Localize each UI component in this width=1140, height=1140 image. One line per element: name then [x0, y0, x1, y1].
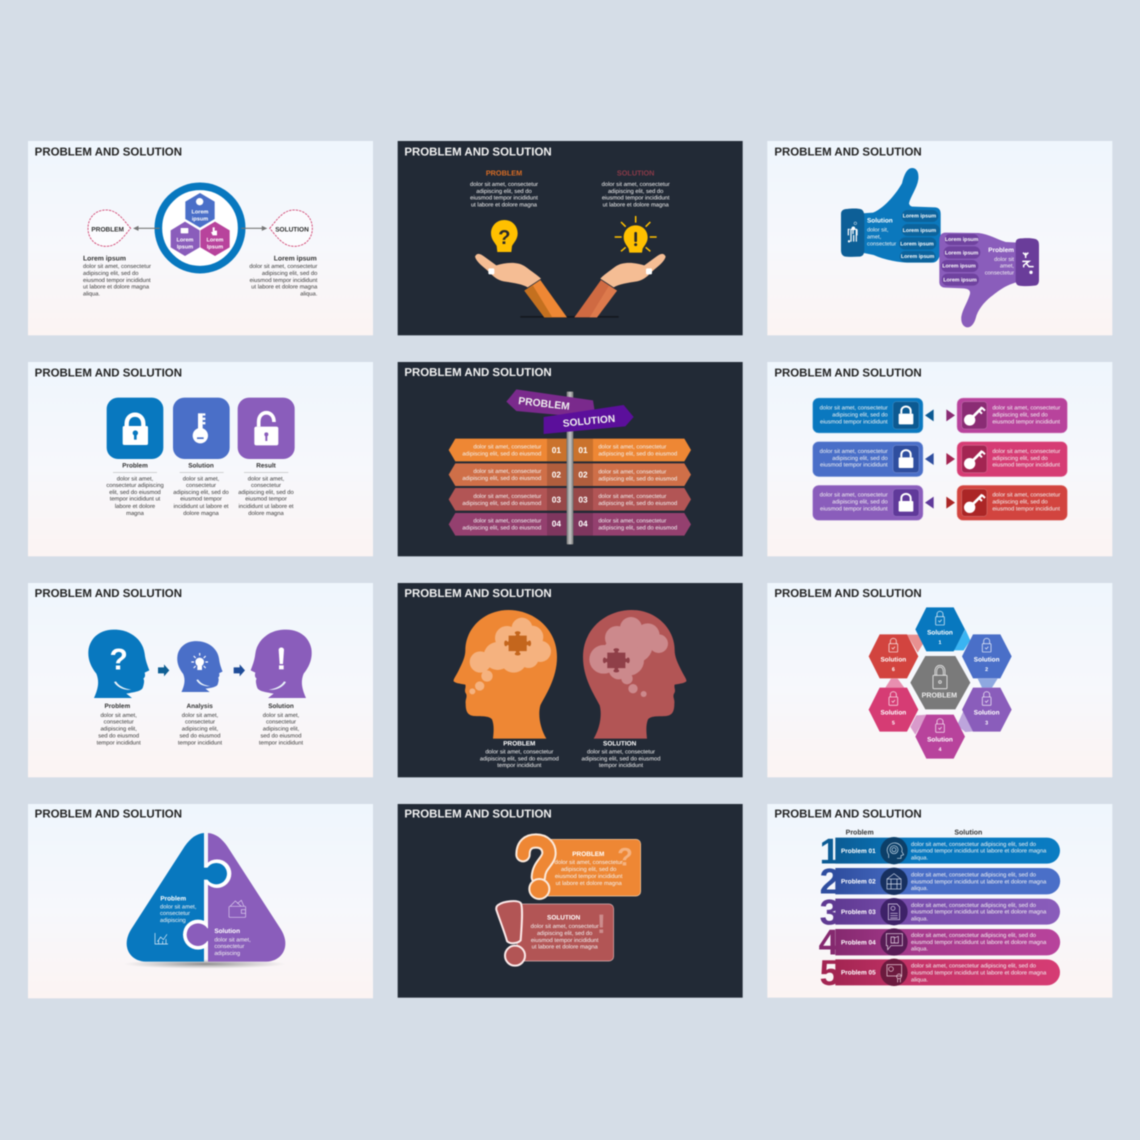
row 3: dolor sit amet, consectetur adipiscing elit, sed do [911, 902, 1036, 908]
thumbs down pills [941, 234, 980, 286]
row 4: dolor sit amet, consectetur adipiscing elit, sed do [911, 932, 1036, 938]
text right: ut labore et dolore magna [251, 283, 317, 290]
column text: problem: consectetur adipiscing [106, 482, 164, 488]
text left: Lorem ipsum [83, 255, 126, 262]
text: solution: SOLUTION [603, 740, 636, 747]
icon: question mark [523, 841, 549, 899]
arrows left [925, 409, 934, 509]
hexagon right: Ipsum [207, 244, 223, 250]
solution card: SOLUTION [547, 914, 580, 921]
row 2 [820, 861, 1060, 901]
column text: problem: Problem [122, 462, 148, 469]
row 4 right [573, 513, 691, 536]
row 4: eiusmod tempor incididunt ut labore et dolore magna [911, 939, 1046, 945]
problem card: eiusmod tempor incididunt [555, 873, 623, 879]
column text: solution: incididunt ut labore et [173, 503, 229, 509]
hexagon: solution 5: 5 [892, 720, 895, 726]
row 3 left: adipiscing elit, sed do eiusmod [462, 500, 541, 506]
row 5 [820, 952, 1060, 993]
problem sign: PROBLEM [518, 395, 570, 412]
row 1 right: 01 [578, 446, 588, 455]
text: analysis: sed do eiusmod [180, 732, 220, 739]
solution drop [270, 210, 312, 246]
thumbs up pill labels: Lorem ipsum [900, 241, 934, 247]
row 2: aliqua. [911, 885, 928, 891]
key box 2: eiusmod tempor incididunt [992, 461, 1060, 468]
row 2 right: dolor sit amet, consectetur [598, 468, 666, 475]
thumbs up text: dolor sit, [867, 227, 888, 233]
thought cloud red [589, 617, 668, 697]
text: solution: dolor sit amet, [263, 712, 299, 718]
column text: solution: dolore magna [183, 510, 219, 516]
title: PROBLEM AND SOLUTION [404, 366, 552, 379]
key box 1: dolor sit amet, consectetur [992, 404, 1060, 411]
problem text: PROBLEM [486, 169, 522, 177]
row 4 left [449, 513, 567, 536]
panel: question and exclamation cards [398, 804, 743, 998]
thumbs up text: amet, [867, 234, 881, 240]
lock box 1: dolor sit amet, consectetur [820, 404, 888, 411]
panel: three heads [28, 583, 373, 777]
key box 1: eiusmod tempor incididunt [992, 418, 1060, 425]
text: problem: adipiscing elit, [100, 725, 137, 732]
text: problem: tempor incididunt [97, 739, 141, 746]
thumbs up pill labels: Lorem ipsum [901, 254, 934, 259]
lock box 1 [813, 398, 923, 433]
row 3: Problem 03 [841, 909, 876, 916]
row 1: dolor sit amet, consectetur adipiscing elit, sed do [911, 841, 1036, 847]
hexagon right: Lorem [207, 237, 223, 243]
problem text: dolor sit amet, [160, 903, 196, 910]
solution sign: SOLUTION [562, 413, 616, 429]
text: problem: adipiscing elit, sed do eiusmod [480, 755, 559, 762]
column text: problem: tempor incididunt ut [110, 495, 160, 502]
thumbs down text: amet, [1000, 263, 1014, 269]
row 3: eiusmod tempor incididunt ut labore et dolore magna [911, 908, 1046, 915]
hexagon right [200, 222, 230, 256]
hexagon: solution 6 [869, 634, 918, 678]
purple half [208, 833, 285, 962]
row 4: Problem 04 [841, 939, 876, 946]
panel: hands with bulbs [398, 141, 743, 335]
puzzle knob purple [183, 920, 213, 950]
panel: numbered rows [767, 804, 1112, 998]
solution text: consectetur [214, 943, 244, 949]
panel: two heads with puzzle [398, 583, 743, 777]
text right: eiusmod tempor incididunt [250, 277, 317, 283]
left shadow line [520, 316, 619, 318]
thumbs up hand [862, 168, 941, 263]
hexagon left [171, 222, 200, 256]
row 1: 1 [820, 831, 840, 871]
shadow [123, 959, 286, 969]
row 2 right: adipiscing elit, sed do eiusmod [598, 475, 677, 482]
text: solution: tempor incididunt [259, 739, 303, 746]
text right: aliqua. [300, 290, 317, 297]
thumbs down cuff [1016, 238, 1039, 286]
hexagon: solution 2: 2 [985, 667, 988, 672]
text left: adipiscing elit, sed do [83, 270, 138, 276]
text: problem: tempor incididunt [497, 762, 541, 768]
lock box 2: dolor sit amet, consectetur [820, 448, 888, 454]
text left: ut labore et dolore magna [83, 283, 149, 290]
row 5: 5 [820, 952, 840, 993]
column text: result: Result [256, 462, 276, 469]
text: solution: tempor incididunt [599, 762, 643, 768]
solution card: adipiscing elit, sed do [537, 930, 592, 936]
text: solution: adipiscing elit, sed do eiusmod [582, 755, 660, 762]
row 1 right: adipiscing elit, sed do eiusmod [598, 450, 677, 457]
arrows right [946, 409, 955, 509]
solution card: dolor sit amet, consectetur [531, 923, 599, 929]
hexagon: solution 5 [869, 688, 918, 732]
hexagon: solution 5: Solution [880, 709, 906, 716]
lock box 3: dolor sit amet, consectetur [820, 491, 888, 498]
lock box 2: eiusmod tempor incididunt [820, 461, 888, 468]
lock box 3: eiusmod tempor incididunt [820, 505, 888, 512]
solution card [517, 904, 614, 961]
hexagon: solution 4 [915, 715, 965, 759]
column headers: Problem [846, 829, 874, 836]
problem text: dolor sit amet, consectetur [470, 181, 538, 187]
column text: problem: dolor sit amet, [117, 475, 153, 482]
panel: puzzle triangle [28, 804, 373, 998]
problem drop: PROBLEM [91, 226, 124, 233]
problem card: ? [617, 843, 633, 871]
row 1: aliqua. [911, 854, 928, 861]
text right: adipiscing elit, sed do [262, 270, 317, 276]
row 2 left: dolor sit amet, consectetur [473, 468, 541, 474]
key box 3 [957, 485, 1067, 520]
column text: problem: elit, sed do eiusmod [109, 489, 161, 495]
icon: open lock card [238, 398, 295, 459]
column text: solution: consectetur [186, 482, 216, 488]
connectors [885, 629, 998, 735]
problem text: eiusmod tempor incididunt [470, 194, 538, 201]
column text: solution: Solution [188, 462, 214, 469]
row 1 [820, 831, 1060, 871]
text: analysis: adipiscing elit, [182, 725, 218, 732]
hexagon: solution 4: Solution [927, 736, 953, 743]
text: solution: dolor sit amet, consectetur [587, 748, 655, 755]
thumbs up pill labels: Lorem ipsum [903, 213, 936, 219]
text right: dolor sit amet, consectetur [249, 263, 317, 269]
column headers: Solution [954, 829, 982, 836]
text: problem: PROBLEM [503, 740, 535, 747]
head: problem: ? [110, 643, 128, 676]
column text: result: consectetur [251, 482, 281, 488]
row 1: Problem 01 [841, 848, 876, 855]
panel: lock key unlock [28, 362, 373, 556]
thumbs up text: consectetur [867, 240, 896, 247]
key box 1 [957, 398, 1067, 433]
icon: wallet [229, 900, 246, 917]
title: PROBLEM AND SOLUTION [35, 366, 182, 379]
puzzle knob blue [203, 859, 231, 888]
puzzle orange [504, 631, 531, 655]
solution text: SOLUTION [617, 169, 654, 177]
row 3 left: dolor sit amet, consectetur [473, 493, 541, 499]
row 1 left [449, 439, 567, 461]
problem card [544, 839, 641, 896]
row 3 right: dolor sit amet, consectetur [598, 493, 666, 499]
lock box 3: adipiscing elit, sed do [832, 498, 888, 505]
panel: signpost [398, 362, 743, 556]
row 4 right: dolor sit amet, consectetur [598, 517, 666, 524]
hexagon: solution 2: Solution [974, 656, 1000, 663]
column text: result: dolor sit amet, [248, 475, 284, 482]
icon: exclamation bulb [615, 216, 657, 253]
thumbs up pills [899, 210, 940, 262]
row 4: aliqua. [911, 945, 928, 952]
puzzle red [603, 648, 630, 672]
column text: result: eiusmod tempor [245, 495, 287, 502]
problem card: adipiscing elit, sed do [561, 866, 616, 872]
blue ring [158, 186, 242, 270]
text: problem: dolor sit amet, consectetur [485, 748, 553, 755]
text left: dolor sit amet, consectetur [83, 263, 151, 269]
row 4 right: adipiscing elit, sed do eiusmod [598, 524, 677, 531]
text: solution: sed do eiusmod [261, 732, 301, 739]
row 3 right [573, 488, 691, 511]
row 4 left: dolor sit amet, consectetur [473, 517, 541, 524]
column text: problem: magna [126, 510, 144, 516]
problem card: dolor sit amet, consectetur [555, 859, 623, 865]
hexagon: solution 1 [915, 607, 965, 651]
key box 3: adipiscing elit, sed do [992, 498, 1048, 505]
title: PROBLEM AND SOLUTION [774, 366, 922, 379]
arrow left [134, 227, 160, 230]
row 1 left: 01 [552, 446, 561, 455]
thumbs down pill labels: Lorem ipsum [945, 250, 978, 256]
row 3 left [449, 488, 567, 511]
thumbs up cuff [841, 209, 864, 257]
solution text: dolor sit amet, [214, 936, 251, 943]
arrow right [241, 227, 266, 230]
hexagon: solution 3: 3 [985, 720, 988, 726]
arrow 2 [234, 664, 245, 676]
hexagon: solution 6: Solution [880, 656, 906, 663]
thumbs down pill labels: Lorem ipsum [942, 263, 976, 269]
row 2: 2 [820, 861, 840, 901]
hexagon: problem: PROBLEM [922, 692, 957, 699]
title: PROBLEM AND SOLUTION [774, 146, 922, 158]
solution text: eiusmod tempor incididunt [602, 194, 670, 201]
icon: question bulb: ? [498, 226, 510, 248]
row 2: dolor sit amet, consectetur adipiscing elit, sed do [911, 871, 1036, 878]
problem text: Problem [160, 895, 186, 902]
thumbs down text: consectetur [985, 269, 1014, 276]
pole [567, 392, 573, 544]
head: orange [454, 610, 557, 739]
row 1 right [573, 439, 691, 461]
problem card: PROBLEM [572, 851, 604, 858]
column text: result: incididunt ut labore et [238, 503, 294, 509]
thumbs up pill labels: Lorem ipsum [903, 228, 936, 233]
solution drop: SOLUTION [275, 226, 309, 233]
hexagon: problem [910, 656, 970, 709]
column text: solution: adipiscing elit, sed do [173, 489, 229, 495]
row 4 left: adipiscing elit, sed do eiusmod [462, 524, 541, 531]
icon: lock card [107, 398, 163, 459]
problem card: ut labore et dolore magna [556, 880, 622, 886]
row 5: eiusmod tempor incididunt ut labore et dolore magna [911, 969, 1046, 976]
row 4 [819, 922, 1060, 962]
problem text: adipiscing [160, 917, 186, 923]
right arm [574, 254, 666, 317]
text: analysis: consectetur [185, 718, 215, 725]
row 3: aliqua. [911, 915, 928, 922]
row 1 left: dolor sit amet, consectetur [473, 443, 541, 450]
row 2 right: 02 [578, 470, 588, 479]
text: solution: adipiscing elit, [263, 725, 299, 732]
lock box 1: adipiscing elit, sed do [832, 411, 888, 418]
icon: exclamation mark [496, 901, 525, 966]
row 5: aliqua. [911, 976, 928, 983]
column text: solution: dolor sit amet, [183, 475, 219, 482]
key box 1: adipiscing elit, sed do [992, 411, 1048, 418]
panel: locks and keys [767, 362, 1112, 556]
text: analysis: Analysis [187, 703, 213, 710]
row 3: 3 [820, 892, 840, 932]
hexagon top: Lorem [192, 208, 208, 215]
hexagon: solution 4: 4 [939, 747, 942, 752]
hexagon: solution 3 [962, 688, 1012, 732]
hexagon: solution 1: 1 [939, 640, 942, 645]
row 2 left: adipiscing elit, sed do eiusmod [462, 475, 541, 481]
row 5: Problem 05 [841, 969, 876, 976]
column text: result: adipiscing elit, sed do [238, 489, 294, 495]
lock box 3 [813, 485, 923, 520]
panel: circle hexagons problem solution [28, 141, 373, 335]
row 4 right: 04 [578, 519, 588, 529]
key box 3: eiusmod tempor incididunt [992, 505, 1060, 512]
panel: thumbs up and down [767, 141, 1112, 335]
thumbs down text: Problem [988, 247, 1014, 254]
text: problem: Problem [105, 703, 130, 710]
text: problem: consectetur [104, 718, 134, 725]
column text: problem: labore et dolore [115, 503, 155, 509]
thumbs down pill labels: Lorem ipsum [943, 277, 977, 283]
solution sign [544, 405, 634, 434]
solution card: eiusmod tempor incididunt [531, 937, 599, 943]
solution text: adipiscing elit, sed do [608, 188, 663, 194]
problem text: consectetur [160, 910, 190, 916]
thought cloud orange [469, 618, 551, 694]
row 1 right: dolor sit amet, consectetur [598, 443, 666, 450]
row 3 [820, 892, 1060, 932]
hexagon: solution 6: 6 [892, 667, 895, 672]
left arm [475, 254, 567, 317]
problem sign [506, 389, 595, 416]
text: analysis: tempor incididunt [178, 739, 222, 746]
hexagon left: Lorem [177, 237, 193, 243]
row 2 left: 02 [552, 470, 561, 479]
row 1 left: adipiscing elit, sed do eiusmod [462, 450, 541, 457]
title: PROBLEM AND SOLUTION [35, 587, 182, 600]
thumbs up text: Solution [867, 217, 893, 224]
panel: hexagon solutions [767, 583, 1112, 777]
thumbs down hand [939, 233, 1019, 327]
problem text: adipiscing elit, sed do [476, 188, 532, 194]
key box 2: adipiscing elit, sed do [992, 455, 1048, 461]
icon: key card [173, 398, 230, 459]
column text: result: dolore magna [248, 510, 284, 516]
lock box 2: adipiscing elit, sed do [832, 455, 888, 461]
lock box 1: eiusmod tempor incididunt [820, 418, 888, 425]
hexagon: solution 3: Solution [974, 709, 1000, 716]
text right: Lorem ipsum [274, 255, 317, 262]
row 3 right: 03 [578, 495, 588, 504]
head: problem [88, 630, 149, 698]
solution text: dolor sit amet, consectetur [602, 181, 670, 187]
row 5: dolor sit amet, consectetur adipiscing elit, sed do [911, 962, 1036, 969]
key box 3: dolor sit amet, consectetur [992, 491, 1060, 498]
icon: chart [155, 933, 168, 944]
solution text: adipiscing [214, 950, 240, 956]
row 2: eiusmod tempor incididunt ut labore et dolore magna [911, 878, 1046, 885]
key box 2 [957, 442, 1067, 477]
icon: question bulb [491, 220, 518, 252]
row 2 left [449, 463, 567, 486]
row 4 left: 04 [552, 519, 561, 529]
title: PROBLEM AND SOLUTION [774, 807, 922, 820]
row 4: 4 [819, 922, 839, 962]
text: solution: Solution [268, 703, 294, 710]
column text: solution: eiusmod tempor [180, 495, 222, 502]
title: PROBLEM AND SOLUTION [404, 587, 552, 600]
solution card: ! [597, 909, 606, 939]
hexagon left: Ipsum [177, 244, 193, 250]
key box 2: dolor sit amet, consectetur [992, 448, 1060, 454]
thumbs down pill labels: Lorem ipsum [945, 237, 978, 242]
solution card: ut labore et dolore magna [532, 943, 598, 950]
hexagon top [185, 193, 215, 228]
blue half [127, 833, 204, 962]
hexagon: solution 2 [962, 634, 1012, 678]
head: solution [251, 630, 312, 698]
text: problem: dolor sit amet, [100, 712, 137, 718]
row 1: eiusmod tempor incididunt ut labore et dolore magna [911, 847, 1046, 854]
row 3 right: adipiscing elit, sed do eiusmod [598, 500, 677, 506]
title: PROBLEM AND SOLUTION [774, 587, 922, 600]
solution text: Solution [214, 928, 240, 935]
problem text: ut labore et dolore magna [471, 201, 537, 208]
text left: aliqua. [83, 290, 100, 297]
lock box 2 [813, 442, 923, 477]
hexagon: solution 1: Solution [927, 629, 953, 636]
title: PROBLEM AND SOLUTION [35, 146, 182, 158]
solution text: ut labore et dolore magna [603, 201, 669, 208]
row 3 left: 03 [552, 495, 561, 504]
problem drop [88, 210, 131, 246]
hexagon top: ipsum [192, 215, 208, 222]
thumbs down text: dolor sit [994, 256, 1014, 262]
title: PROBLEM AND SOLUTION [35, 808, 182, 820]
arrow 1 [158, 664, 169, 676]
title: PROBLEM AND SOLUTION [404, 808, 552, 820]
text: solution: consectetur [266, 718, 296, 725]
row 2 right [573, 463, 691, 486]
row 2: Problem 02 [841, 878, 876, 885]
head: red [583, 610, 686, 739]
title: PROBLEM AND SOLUTION [404, 146, 552, 158]
text: problem: sed do eiusmod [98, 732, 139, 739]
head: analysis [177, 641, 223, 692]
text left: eiusmod tempor incididunt [83, 277, 151, 283]
text: analysis: dolor sit amet, [182, 712, 218, 718]
